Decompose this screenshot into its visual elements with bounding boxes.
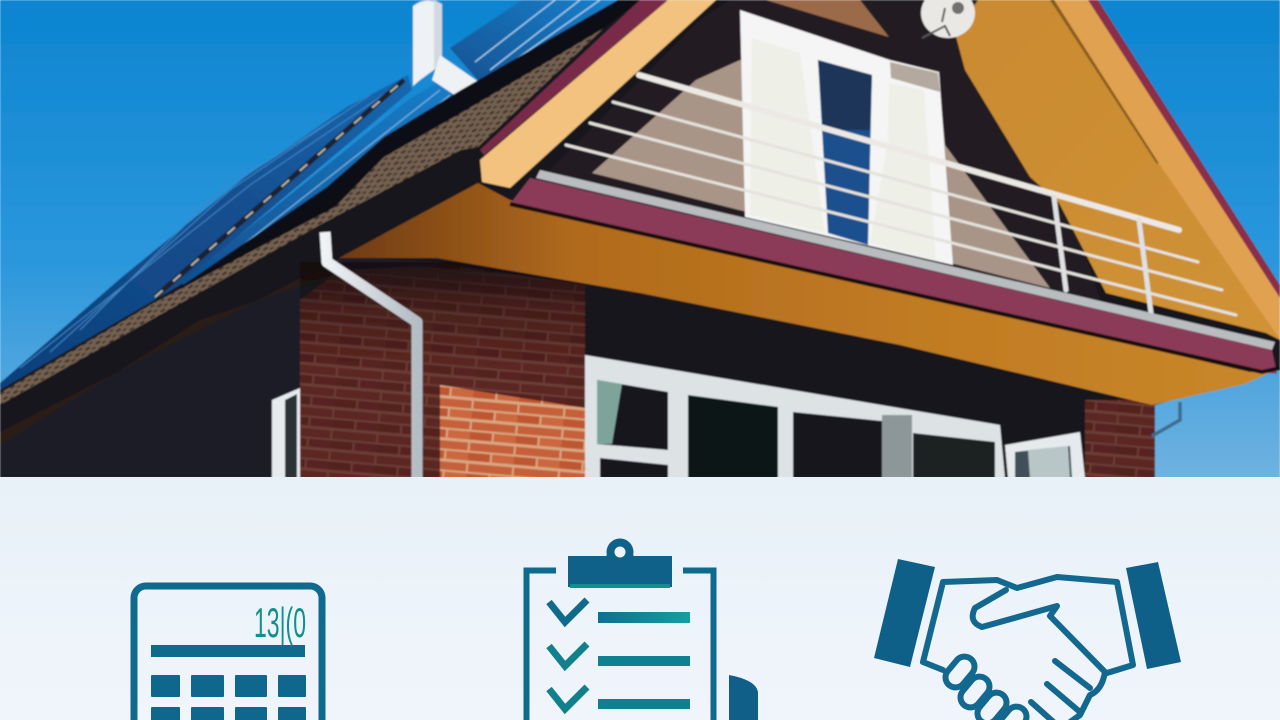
brick top shadow — [300, 262, 585, 370]
calculator display digits: 13|(0 — [254, 599, 306, 646]
pane one lower — [600, 458, 668, 478]
dark brick left — [300, 265, 442, 478]
right dark brick — [1085, 400, 1155, 478]
gable taupe panel — [592, 60, 1050, 288]
lower panel background — [0, 477, 1280, 720]
main dark wall — [585, 282, 1155, 478]
calculator bar — [151, 645, 305, 657]
icon: handshake — [874, 559, 1181, 720]
hand outlines — [923, 577, 1133, 720]
balcony railing — [566, 75, 1236, 315]
downpipe — [325, 232, 417, 478]
brick corner upper — [430, 262, 585, 410]
under-eave brown shade — [0, 258, 340, 445]
house silhouette base — [0, 0, 1280, 478]
calculator keys — [151, 675, 306, 720]
wooden soffit — [339, 183, 1280, 405]
right cuff — [1126, 562, 1181, 669]
right downspout — [1152, 402, 1180, 436]
icon: calculator — [134, 586, 322, 720]
right curtain — [870, 83, 936, 260]
gripped fingers — [941, 653, 979, 691]
gable dark wall — [520, 0, 1100, 300]
upper window frame — [740, 10, 953, 265]
maroon fascia — [510, 178, 1277, 374]
right bargeboard — [1054, 0, 1280, 340]
black gutter — [0, 150, 480, 432]
roof shingles — [0, 28, 604, 405]
grey column — [882, 415, 912, 478]
left maroon band — [480, 0, 668, 155]
pane four — [913, 433, 995, 478]
open sash — [1005, 432, 1085, 478]
wood shadow line — [1052, 0, 1158, 163]
clipboard clip — [568, 538, 672, 588]
pane one — [597, 380, 668, 450]
left cuff — [874, 559, 935, 667]
checklist lines — [598, 612, 690, 709]
pane two — [688, 395, 778, 478]
small left window — [272, 388, 300, 478]
brick corner lower orange — [440, 385, 585, 478]
gable top shingles — [766, 0, 889, 37]
satellite dish — [921, 0, 975, 38]
left curtain — [750, 38, 825, 233]
chimney — [413, 0, 442, 86]
photo: house with rooftop solar panels — [0, 0, 1280, 478]
white flashing block — [432, 55, 483, 100]
balcony base strip — [536, 170, 1275, 350]
lower window — [585, 355, 1085, 478]
solar panels: lower array — [0, 75, 412, 390]
pen — [729, 675, 758, 720]
black roof strip — [150, 0, 640, 308]
pane three — [793, 412, 882, 478]
left cream bargeboard — [480, 0, 716, 188]
icon: clipboard checklist — [526, 538, 758, 720]
lower wall: dark siding — [0, 258, 445, 478]
right wooden gable soffit — [955, 0, 1280, 340]
solar panels: middle array — [180, 76, 470, 285]
solar panels: top array — [450, 0, 618, 85]
centre glass — [818, 60, 872, 245]
fascia shadow — [510, 204, 1280, 372]
checklist ticks — [549, 600, 587, 709]
sky — [0, 0, 1280, 478]
maroon roof edge — [1088, 0, 1280, 298]
